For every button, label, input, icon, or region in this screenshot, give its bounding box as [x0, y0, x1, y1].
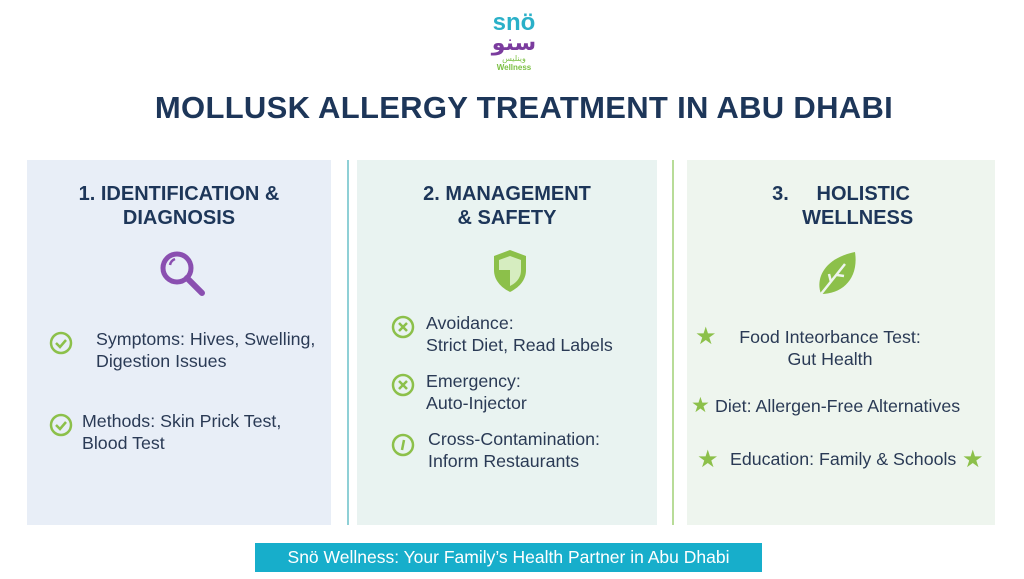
item: methods: Blood Test — [82, 433, 165, 453]
item: symptoms: Symptoms: Hives, Swelling, — [96, 329, 315, 349]
logo: وينليس — [502, 54, 526, 63]
item: symptoms — [50, 329, 315, 371]
logo: سنو — [492, 31, 536, 56]
item: emergency: Emergency: — [426, 371, 521, 391]
item: diet: Diet: Allergen-Free Alternatives — [715, 396, 960, 416]
logo — [490, 9, 536, 72]
item: education: ★ — [962, 446, 984, 473]
item: symptoms: Digestion Issues — [96, 351, 226, 371]
item: emergency: Auto-Injector — [426, 393, 527, 413]
heading 1: 1. IDENTIFICATION & — [79, 183, 279, 205]
heading 2: 2. MANAGEMENT — [423, 183, 591, 205]
item: food intolerance: Gut Health — [788, 349, 872, 369]
item: cross-contamination: Cross-Contamination: — [428, 429, 600, 449]
panel: identification & diagnosis — [27, 160, 331, 525]
item: food intolerance: ★ — [695, 323, 717, 350]
heading 2 — [423, 183, 591, 229]
heading 1 — [79, 183, 279, 229]
panel: holistic wellness — [687, 160, 995, 525]
heading 3: 3. HOLISTIC — [772, 183, 910, 205]
item: avoidance — [392, 313, 613, 355]
item: education: ★ — [697, 446, 719, 473]
icon: magnifier — [160, 252, 205, 296]
heading 3: WELLNESS — [802, 207, 913, 229]
item: cross-contamination — [392, 429, 600, 471]
panel: management & safety — [357, 160, 657, 525]
logo: snö — [493, 9, 535, 36]
logo: Wellness — [497, 63, 531, 72]
item: diet: ★ — [691, 394, 710, 417]
item: avoidance: Strict Diet, Read Labels — [426, 335, 613, 355]
item: cross-contamination: Inform Restaurants — [428, 451, 579, 471]
heading 1: DIAGNOSIS — [123, 207, 235, 229]
footer banner — [255, 543, 762, 572]
title: MOLLUSK ALLERGY TREATMENT IN ABU DHABI — [155, 90, 893, 125]
item: avoidance: Avoidance: — [426, 313, 514, 333]
item: food intolerance: Food Inteorbance Test: — [739, 327, 921, 347]
heading 2: & SAFETY — [458, 207, 556, 229]
item: methods: Methods: Skin Prick Test, — [82, 411, 281, 431]
item: food intolerance — [695, 323, 921, 369]
footer banner: Snö Wellness: Your Family’s Health Partner in Abu Dhabi — [288, 547, 729, 567]
item: emergency — [392, 371, 527, 413]
heading 3 — [772, 183, 913, 229]
item: education — [697, 446, 984, 473]
item: education: Education: Family & Schools — [730, 449, 956, 469]
icon: leaf — [819, 252, 856, 294]
item: methods — [50, 411, 281, 453]
icon: shield — [494, 250, 526, 292]
